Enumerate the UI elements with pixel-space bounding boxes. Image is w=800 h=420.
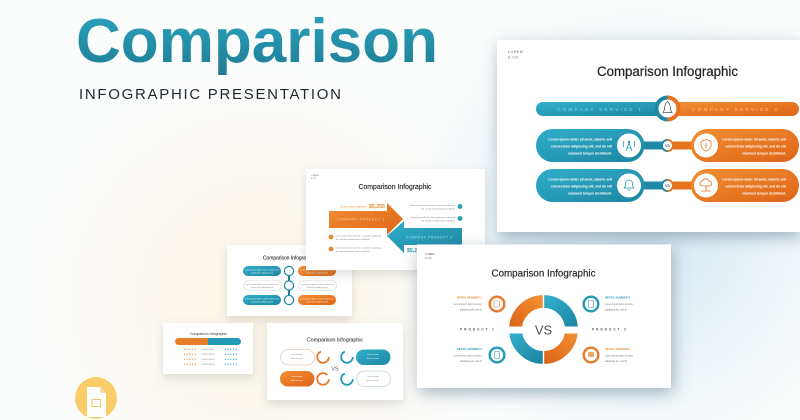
detail 4: DETAIL NUMBER 4 [605, 347, 631, 351]
detail 2 [584, 296, 634, 312]
pill rows: Lorem ipsum dolor sit amet, laboris sed [246, 268, 278, 272]
comparison pills: Lorem ipsum [291, 354, 303, 356]
rating rows: ★★★★★ [224, 363, 238, 366]
row 2: eiusmod tempor incididunt. [568, 192, 612, 196]
rating rows [183, 348, 238, 366]
right checklist: elit, sed do eiusmod tempor incididunt [421, 220, 455, 222]
brand label: LOREM [311, 175, 319, 177]
panel: slide with percentage rings [267, 323, 403, 400]
service header bar [536, 96, 799, 122]
rating rows: Lorem ipsum [201, 358, 215, 361]
pill rows: consectetur adipiscing elit [251, 272, 273, 274]
comparison pills: dolor sit amet [367, 357, 379, 360]
pill rows: consectetur adipiscing elit [251, 286, 273, 289]
row 2: Lorem ipsum dolor sit amet, laboris sed [722, 178, 786, 182]
rating rows: Lorem ipsum [201, 353, 215, 356]
right checklist: Lorem ipsum dolor sit amet, consectetur adipiscing [410, 204, 455, 207]
left checklist: Lorem ipsum dolor sit amet, consectetur adipiscing [336, 246, 381, 250]
detail 4: Lorem ipsum dolor sit amet, [605, 354, 634, 358]
rating rows: ★★★★★ [183, 363, 197, 366]
panel: slide with service comparison list [497, 40, 800, 232]
detail 2: Lorem ipsum dolor sit amet, [605, 303, 634, 306]
row 2: consectetur adipiscing elit, sed do elit [551, 184, 613, 188]
pill rows: Lorem ipsum dolor sit amet, laboris sed [300, 268, 334, 272]
row 1: Lorem ipsum dolor sit amet, laboris sed [722, 138, 786, 142]
row 1: Lorem ipsum dolor sit amet, laboris sed [548, 138, 612, 142]
comparison pills: Lorem ipsum [367, 376, 379, 378]
row 2: consectetur adipiscing elit, sed do elit [725, 184, 787, 188]
orange arrow: COMPANY PRODUCT 1 [337, 218, 384, 222]
detail 1: DETAIL NUMBER 1 [457, 296, 482, 300]
heading: Comparison Infographic [492, 268, 596, 280]
detail 1 [454, 296, 504, 312]
panel: slide with VS ring [417, 244, 671, 388]
pill rows: Lorem ipsum dolor sit amet, laboris sed [300, 283, 334, 286]
brand label: & CO. [425, 256, 433, 260]
brand label: LOREM [425, 253, 435, 256]
comparison pills: Lorem ipsum [367, 354, 379, 356]
row 2: VS [665, 184, 670, 188]
brand label: & CO. [311, 178, 317, 180]
detail 3: adipiscing elit, sed do [460, 360, 483, 363]
heading: Comparison Infographic [307, 338, 363, 344]
ring chart: VS [535, 322, 552, 338]
rating rows: ★★★★★ [183, 348, 197, 351]
pill rows [243, 266, 336, 305]
table header bar [175, 338, 241, 345]
left checklist: elit, sed do eiusmod tempor incididunt [336, 250, 370, 253]
brand label: & CO. [508, 56, 520, 60]
brand label: LOREM [508, 50, 523, 54]
rating rows: ★★★★★ [224, 358, 238, 361]
heading: Comparison Infographic [597, 64, 738, 79]
panel: slide with rating table [163, 323, 253, 374]
product labels: PRODUCT 1 [460, 328, 494, 332]
detail 4: adipiscing elit, sed do [605, 360, 628, 363]
row 1 [536, 129, 799, 162]
detail 1: Lorem ipsum dolor sit amet, [454, 303, 482, 306]
panel: slide with opposing arrows [306, 169, 485, 270]
left checklist [329, 234, 381, 253]
row 2 [536, 169, 799, 202]
product labels [460, 328, 626, 332]
right checklist: elit, sed do eiusmod tempor incididunt [421, 208, 455, 210]
row 2: eiusmod tempor incididunt. [742, 192, 786, 196]
rating rows: Lorem ipsum [201, 348, 215, 351]
row 2: Lorem ipsum dolor sit amet, laboris sed [548, 178, 612, 182]
right checklist: Lorem ipsum dolor sit amet, consectetur adipiscing [410, 216, 455, 219]
row 1: consectetur adipiscing elit, sed do elit [551, 144, 613, 148]
service header bar: COMPANY SERVICE 2 [692, 107, 777, 113]
detail 2: adipiscing elit, sed do [605, 308, 628, 312]
blue arrow [387, 221, 462, 254]
comparison pills: dolor sit amet [291, 379, 303, 382]
title: Comparison [76, 7, 438, 76]
pill rows: Lorem ipsum dolor sit amet, laboris sed [246, 283, 278, 286]
row 1: consectetur adipiscing elit, sed do elit [725, 144, 787, 148]
blue arrow: COMPANY PRODUCT 2 [406, 236, 452, 240]
left checklist: Lorem ipsum dolor sit amet, consectetur adipiscing [336, 234, 381, 238]
row 1: VS [665, 144, 670, 148]
heading: Comparison Infographic [190, 331, 227, 336]
left checklist: elit, sed do eiusmod tempor incididunt [336, 238, 370, 241]
pill rows: consectetur adipiscing elit [251, 300, 273, 304]
comparison pills: Lorem ipsum [291, 376, 303, 378]
comparison pills [280, 350, 390, 386]
orange arrow: Lorem ipsum dolor sit [340, 206, 366, 208]
rating rows: ★★★★★ [183, 353, 197, 356]
icon: slides document badge [75, 377, 117, 419]
row 1: $ [705, 144, 708, 150]
pill rows: Lorem ipsum dolor sit amet, laboris sed [300, 298, 334, 300]
comparison pills: dolor sit amet [367, 379, 379, 382]
orange arrow [329, 203, 403, 235]
panel: slide with pill rows [227, 245, 352, 316]
pill rows: consectetur adipiscing elit [306, 300, 328, 304]
pill rows: consectetur adipiscing elit [306, 286, 328, 289]
detail 3: DETAIL NUMBER 3 [457, 347, 482, 351]
pill rows: consectetur adipiscing elit [306, 272, 328, 274]
right checklist [410, 204, 462, 222]
rating rows: Lorem ipsum [201, 363, 215, 366]
subtitle: INFOGRAPHIC PRESENTATION [79, 86, 341, 103]
pill rows: Lorem ipsum dolor sit amet, laboris sed [246, 298, 278, 300]
row 1: eiusmod tempor incididunt. [742, 152, 786, 156]
rating rows: ★★★★★ [224, 353, 238, 356]
comparison pills: VS [331, 366, 339, 372]
heading: Comparison Infographic [263, 256, 315, 262]
product labels: PRODUCT 2 [592, 328, 626, 332]
heading: Comparison Infographic [358, 182, 432, 191]
detail 2: DETAIL NUMBER 2 [605, 296, 631, 300]
rating rows: ★★★★★ [183, 358, 197, 361]
service header bar: COMPANY SERVICE 1 [557, 107, 641, 113]
detail 3: Lorem ipsum dolor sit amet, [454, 354, 482, 358]
detail 3 [454, 347, 504, 363]
rating rows: ★★★★★ [224, 348, 238, 351]
ring chart [505, 292, 582, 367]
blue arrow: $5,255 [407, 248, 423, 254]
detail 1: adipiscing elit, sed do [460, 308, 483, 312]
comparison pills: dolor sit amet [291, 357, 303, 360]
detail 4 [584, 347, 634, 363]
orange arrow: $5,255 [369, 204, 385, 210]
row 1: eiusmod tempor incididunt. [568, 152, 612, 156]
